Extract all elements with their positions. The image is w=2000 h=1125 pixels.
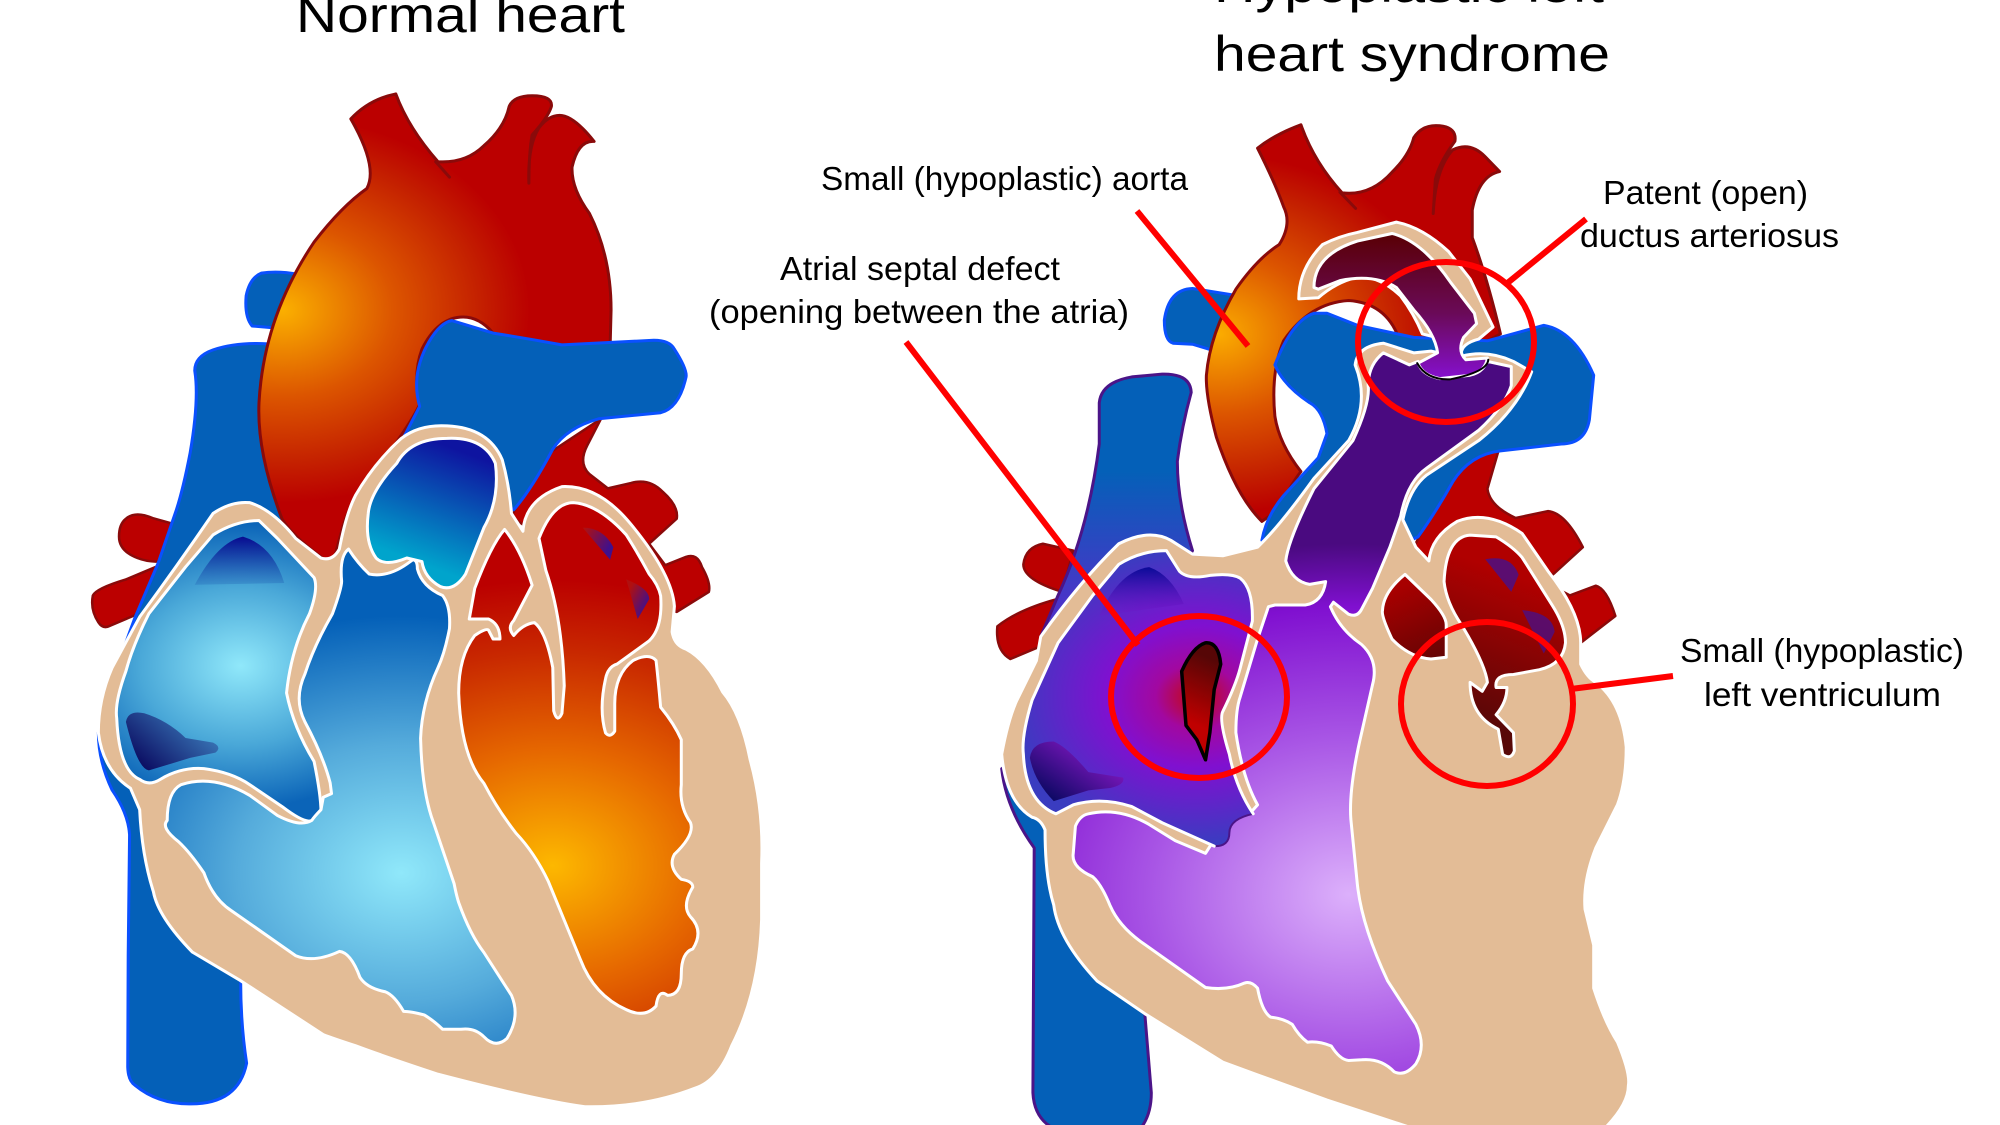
leader line: left ventricle (1571, 676, 1673, 689)
valve leaflet lower (626, 579, 649, 619)
right atrium inner shading top (195, 537, 284, 585)
label: small aorta: Small (hypoplastic) aorta (821, 160, 1189, 197)
label: patent ductus arteriosus: ductus arteriosus (1580, 217, 1839, 254)
vena cava (98, 343, 310, 1104)
pulmonary veins, right side of body (92, 514, 172, 627)
aorta crease (436, 162, 449, 177)
label: patent ductus arteriosus: Patent (open) (1603, 174, 1808, 211)
myocardium (98, 426, 762, 1107)
ductus arteriosus chamber (1314, 233, 1487, 379)
leader line: ductus arteriosus (1505, 219, 1586, 285)
hypoplastic left atrium and ventricle (1444, 535, 1565, 757)
aorta (1206, 125, 1500, 521)
label: atrial septal defect: Atrial septal defect (780, 250, 1060, 287)
pulmonary veins, right side of body (997, 544, 1073, 659)
title: hypoplastic left heart syndrome (1214, 0, 1610, 82)
aorta crease (1340, 192, 1356, 208)
valve leaflet upper (583, 528, 613, 560)
ductus black boundary (1417, 360, 1488, 379)
inferior vena cava (1002, 754, 1151, 1125)
right ventricle (165, 549, 515, 1043)
red callout circle: left ventricle (1401, 622, 1573, 786)
pulmonary trunk chamber (367, 438, 496, 588)
right atrium white wall edge (1023, 551, 1253, 846)
left atrium back wall and pulmonary veins (1414, 444, 1615, 643)
leader line: atrial septal defect (906, 342, 1138, 645)
left atrium and left ventricle (459, 503, 698, 1013)
small red chamber (1382, 574, 1446, 659)
label: small left ventricle (1680, 632, 1964, 713)
label: atrial septal defect: (opening between the atria) (709, 293, 1129, 330)
right atrium inner shading bottom (1030, 742, 1123, 801)
label: atrial septal defect (709, 250, 1129, 330)
title: hypoplastic left heart syndrome: heart syndrome (1214, 26, 1610, 82)
aorta (259, 94, 611, 560)
myocardium (1002, 222, 1629, 1125)
leader line: aorta (1137, 211, 1248, 346)
pulmonary artery branches (1262, 313, 1594, 547)
pulmonary artery, main branch (401, 321, 686, 510)
label: patent ductus arteriosus (1580, 174, 1839, 254)
right atrium (1023, 551, 1253, 846)
valve leaflet upper (1485, 558, 1519, 592)
right atrium inner shading bottom (126, 712, 218, 770)
valve leaflet lower (1522, 610, 1555, 653)
label: small left ventricle: Small (hypoplastic) (1680, 632, 1964, 669)
left atrium back wall and pulmonary veins (511, 419, 709, 612)
pulmonary artery, left stub (1164, 289, 1240, 349)
diagram: normal heart (92, 94, 762, 1107)
right ventricle and pulmonary trunk (1073, 353, 1511, 1073)
pulmonary artery, left stub (246, 272, 298, 328)
atrial septal defect (1182, 643, 1221, 760)
right atrium inner shading top (1099, 567, 1184, 616)
diagram: hypoplastic left heart (997, 125, 1629, 1125)
label: small left ventricle: left ventriculum (1704, 676, 1941, 713)
red callout circle: atrial septal defect (1111, 616, 1287, 778)
superior vena cava (1041, 374, 1193, 637)
right atrium (116, 521, 321, 821)
red callout circle: ductus arteriosus (1358, 262, 1534, 422)
